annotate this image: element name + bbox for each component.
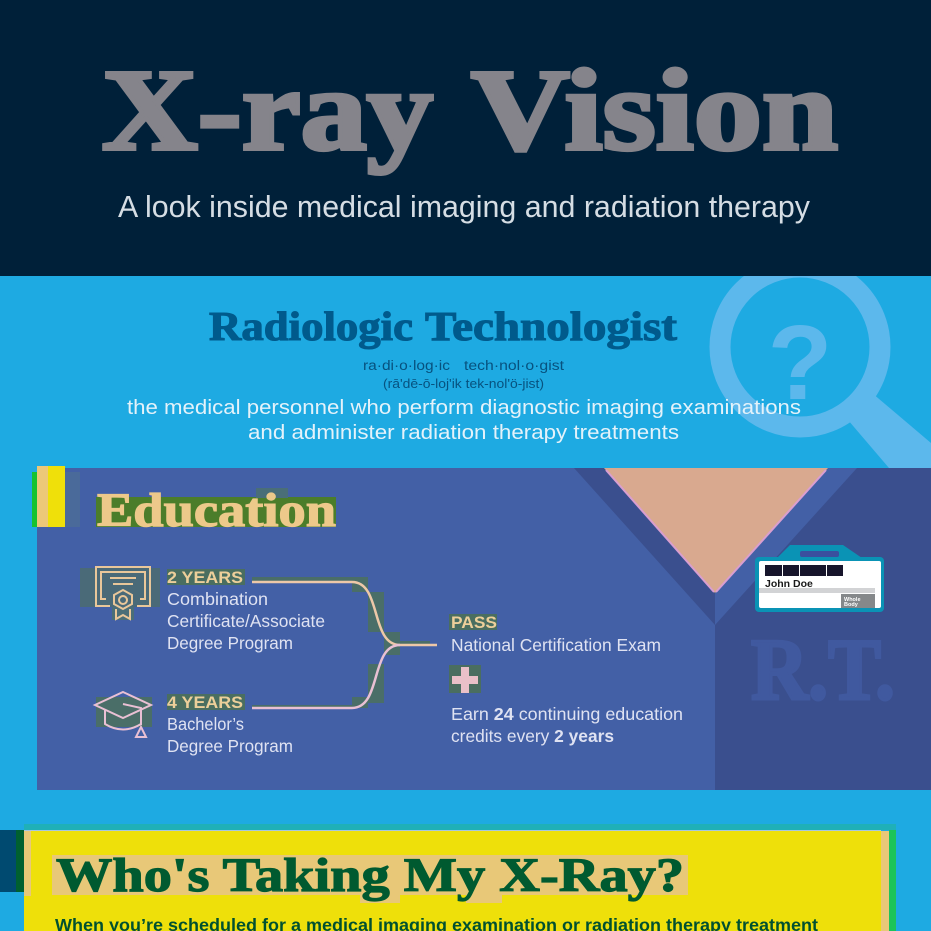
scrubs illustration xyxy=(574,468,931,790)
heading: Radiologic Technologist: Radiologic xyxy=(209,303,413,349)
panel: definition xyxy=(127,303,801,444)
arrow: converging connector xyxy=(252,577,437,708)
subtitle: A look inside medical imaging and radiation therapy xyxy=(118,189,810,224)
title xyxy=(102,47,838,175)
panel: who's taking my x-ray xyxy=(0,824,896,931)
icon: magnifying glass with question mark xyxy=(720,267,931,468)
description: combination: Combination xyxy=(167,589,268,609)
description: combination xyxy=(167,589,325,653)
id badge xyxy=(755,545,884,612)
description: combination: Degree Program xyxy=(167,633,293,653)
section marker xyxy=(0,830,31,896)
icon: magnifying glass with question mark: ? xyxy=(768,304,832,422)
heading: Radiologic Technologist xyxy=(209,303,677,349)
icon: diploma xyxy=(80,567,160,620)
id badge: Body xyxy=(844,602,859,608)
title: X-ray xyxy=(102,47,433,175)
id badge: John Doe xyxy=(765,578,813,590)
syllable breakdown xyxy=(363,358,564,373)
continuing education text: credits every 2 years xyxy=(451,726,614,746)
description: bachelor's: Degree Program xyxy=(167,736,293,756)
id badge: Whole xyxy=(844,597,860,603)
icon: graduation cap xyxy=(95,692,152,737)
label: pass: PASS xyxy=(451,613,497,632)
requirements xyxy=(449,613,683,746)
R.T. watermark: R.T. xyxy=(751,622,895,719)
description: bachelor's: Bachelor’s xyxy=(167,714,244,734)
continuing education text xyxy=(451,704,683,746)
icon: plus xyxy=(449,665,481,693)
continuing education text: Earn 24 continuing education xyxy=(451,704,683,724)
exam text: National Certification Exam xyxy=(451,635,661,655)
section marker xyxy=(32,466,80,527)
pathway: two years xyxy=(167,568,325,653)
pathway: four years xyxy=(167,693,293,756)
definition text: and administer radiation therapy treatments xyxy=(248,421,679,444)
heading: Who's Taking My X-Ray? xyxy=(56,849,684,902)
description: bachelor's xyxy=(167,714,293,756)
heading: Radiologic Technologist: Technologist xyxy=(425,303,677,349)
syllable breakdown: tech·nol·o·gist xyxy=(464,358,564,373)
definition text: the medical personnel who perform diagnostic imaging examinations xyxy=(127,396,801,419)
definition text xyxy=(127,396,801,444)
label: 4 years: 4 YEARS xyxy=(167,693,243,712)
label: 2 years: 2 YEARS xyxy=(167,568,243,587)
pronunciation: (rā'dē-ō-loj'ik tek-nol'ö-jist) xyxy=(383,377,544,391)
panel: education xyxy=(32,466,931,790)
syllable breakdown: ra·di·o·log·ic xyxy=(363,358,450,373)
heading: education: Education xyxy=(97,484,336,537)
description: combination: Certificate/Associate xyxy=(167,611,325,631)
title: Vision xyxy=(471,47,838,175)
header band xyxy=(0,0,931,276)
